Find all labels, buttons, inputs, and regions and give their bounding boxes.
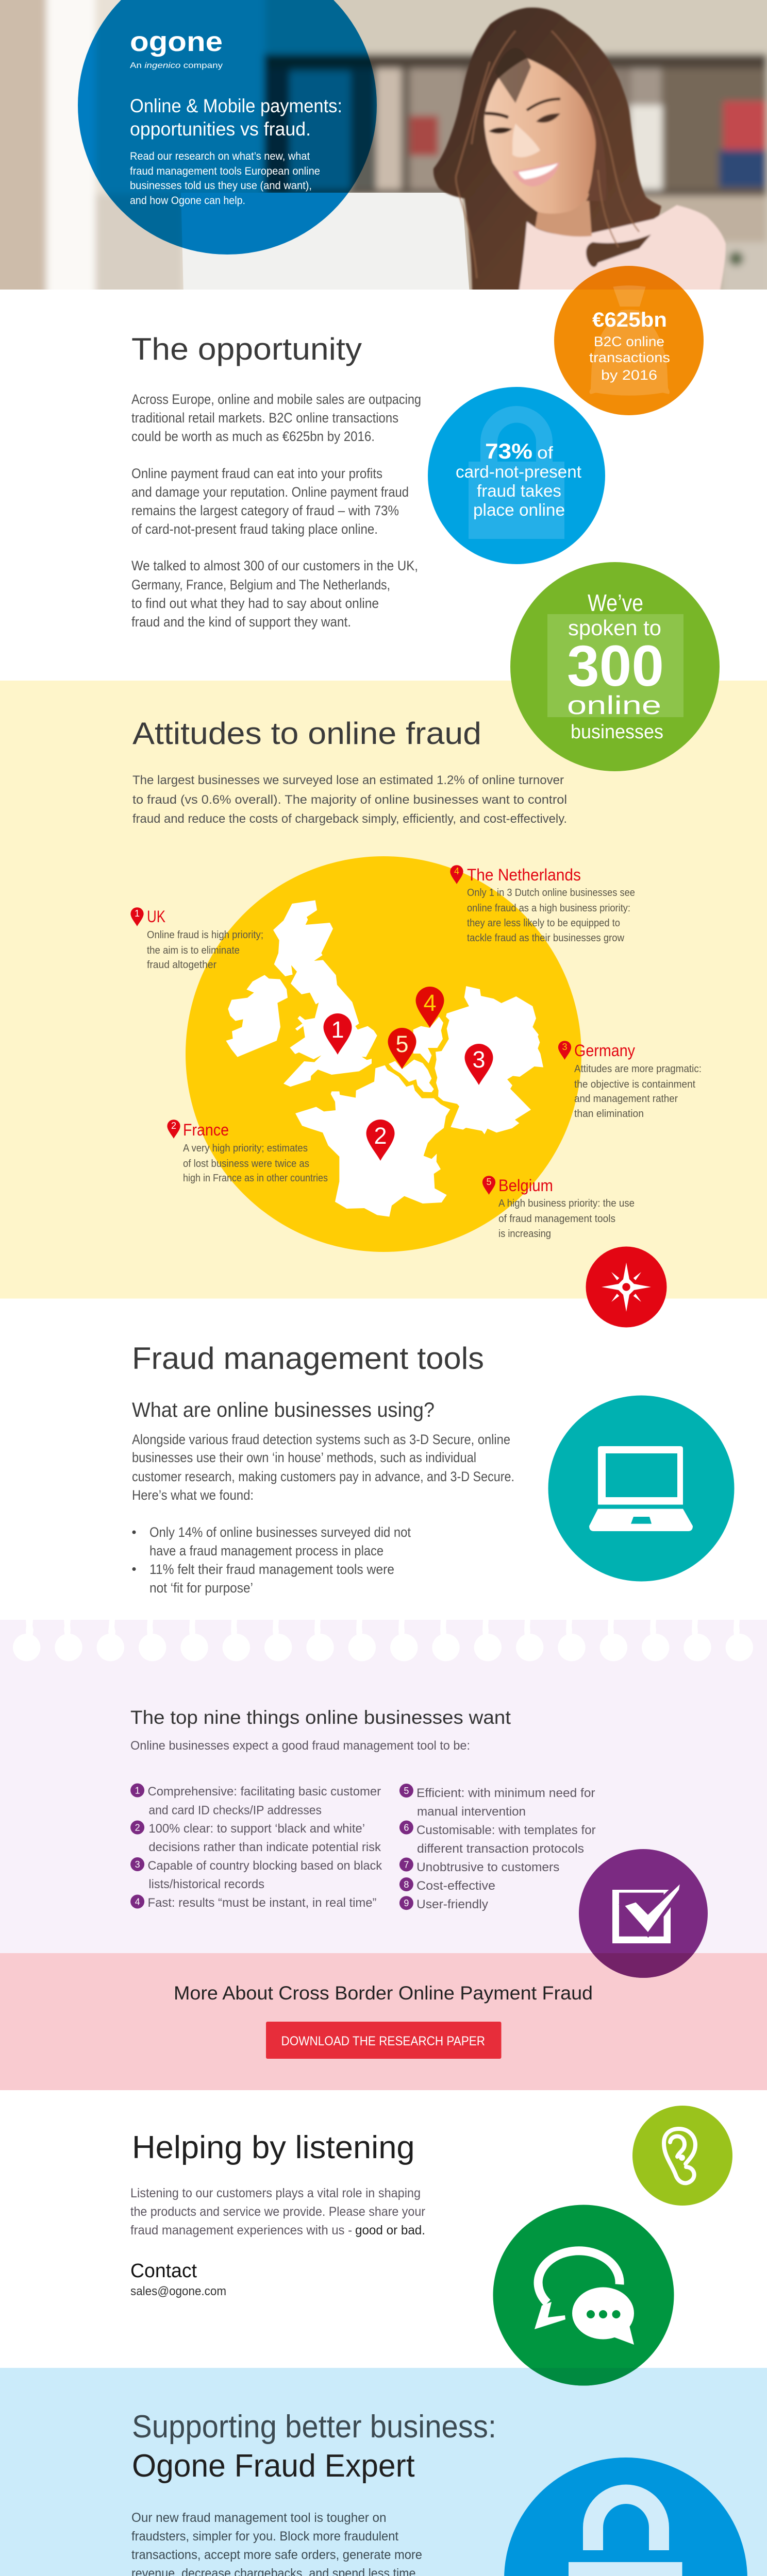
stat circle: spoken to 300 (510, 562, 720, 771)
map pin 1 (324, 1013, 352, 1055)
stat circle: spoken to 300: We’ve (588, 589, 643, 616)
attitudes intro text: The largest businesses we surveyed lose an estimated 1.2% of online turnover (132, 773, 564, 787)
panel: attitudes to online fraud (130, 716, 702, 1327)
callout: France: of lost business were twice as (183, 1158, 309, 1170)
callout: Germany: and management rather (574, 1093, 678, 1105)
opportunity body text: to find out what they had to say about online (131, 596, 379, 611)
tools body text (132, 1432, 514, 1503)
left list: items one to four: decisions rather than indicate potential risk (148, 1840, 381, 1854)
stat circle: 73 percent: 73% (485, 439, 532, 463)
map pin 4 (415, 987, 444, 1028)
button: download research paper: DOWNLOAD THE RESEARCH PAPER (281, 2034, 485, 2048)
panel: helping by listening (130, 2106, 732, 2385)
heading: fraud management tools: Fraud management tools (132, 1341, 484, 1376)
callout: Belgium (482, 1176, 635, 1240)
contact details (130, 2260, 226, 2298)
subheading: what are businesses using: What are online businesses using? (132, 1399, 435, 1421)
listening body text: fraud management experiences with us - (130, 2223, 352, 2238)
opportunity body text: traditional retail markets. B2C online transactions (131, 410, 398, 426)
yellow map circle (186, 856, 581, 1252)
tools body text: Here’s what we found: (132, 1487, 254, 1503)
icon: compass (586, 1247, 667, 1327)
callout: Germany: Germany (574, 1041, 635, 1060)
panel: more about cross border fraud (174, 1982, 593, 2059)
attitudes intro text: to fraud (vs 0.6% overall). The majority of online businesses want to control (132, 793, 567, 807)
stat circle: 73 percent: card-not-present (456, 462, 581, 481)
callout: France: 2 (171, 1121, 176, 1131)
tools body text: Alongside various fraud detection systems such as 3-D Secure, online (132, 1432, 510, 1447)
left list: items one to four: 2 (135, 1823, 140, 1833)
stat circle: spoken to 300: businesses (571, 721, 663, 743)
fraud expert body text: Our new fraud management tool is tougher on (131, 2511, 387, 2525)
stat circle: 73 percent: fraud takes (477, 481, 561, 500)
right list: items five to nine: Customisable: with templates for (416, 1823, 596, 1837)
ogone logo (130, 26, 223, 70)
heading: supporting better business (132, 2409, 496, 2484)
callout: France: France (183, 1121, 229, 1139)
sweater (519, 205, 726, 294)
left list: items one to four: Fast: results “must be instant, in real time” (147, 1896, 377, 1910)
callout: UK: the aim is to eliminate (147, 944, 240, 956)
heading: supporting better business: Supporting better business: (132, 2409, 496, 2445)
heading: the opportunity: The opportunity (131, 332, 362, 366)
findings bullet list: have a fraud management process in place (149, 1543, 384, 1558)
stat circle: 625bn: transactions (589, 350, 670, 365)
left list: items one to four: Comprehensive: facilitating basic customer (147, 1785, 381, 1799)
contact details: sales@ogone.com (130, 2284, 226, 2298)
map pin 3 (465, 1044, 493, 1085)
laptop (181, 193, 470, 294)
icon: money bag (589, 285, 670, 396)
callout: The Netherlands: 4 (454, 866, 459, 876)
stat circle: 625bn: by 2016 (601, 367, 657, 383)
panel: blue intro circle (78, 0, 377, 255)
icon: padlock watermark (469, 406, 564, 539)
right list: items five to nine: Unobtrusive to customers (416, 1860, 559, 1874)
right list: items five to nine: User-friendly (416, 1897, 488, 1911)
hero intro text (130, 150, 320, 207)
heading: top nine: The top nine things online businesses want (130, 1707, 511, 1728)
attitudes intro text: fraud and reduce the costs of chargeback simply, efficiently, and cost-effectively. (132, 812, 567, 826)
callout: UK: 1 (135, 908, 140, 919)
left list: items one to four: 100% clear: to support ‘black and white’ (148, 1822, 365, 1836)
stat circle: 625bn: €625bn (592, 309, 667, 331)
callout: Belgium: of fraud management tools (498, 1213, 615, 1225)
map pin 2 (366, 1120, 395, 1161)
ogone logo: ogone (130, 26, 223, 57)
heading: supporting better business: Ogone Fraud Expert (132, 2448, 415, 2484)
right list: items five to nine: Cost-effective (416, 1879, 495, 1893)
right list: items five to nine: 8 (404, 1879, 409, 1890)
attitudes intro text (132, 773, 567, 826)
callout: The Netherlands: The Netherlands (467, 866, 581, 884)
map pin 1: 1 (331, 1016, 344, 1043)
stat circle: 73 percent: of (537, 443, 554, 462)
hero intro text: and how Ogone can help. (130, 194, 245, 207)
panel: the opportunity (131, 266, 720, 771)
left list: items one to four: lists/historical records (148, 1877, 264, 1891)
opportunity body text: fraud and the kind of support they want. (131, 614, 351, 630)
right list: items five to nine: Efficient: with minimum need for (416, 1786, 595, 1800)
findings bullet list: not ‘fit for purpose’ (149, 1580, 253, 1596)
left list: items one to four: 1 (135, 1786, 140, 1796)
heading: attitudes: Attitudes to online fraud (132, 716, 481, 751)
opportunity body text: Germany, France, Belgium and The Netherlands, (131, 577, 390, 592)
icon: ear (632, 2106, 732, 2206)
neck (535, 193, 592, 236)
callout: Belgium: 5 (486, 1177, 492, 1187)
icon: checkbox (579, 1849, 708, 1978)
ogone logo: An ingenico company (130, 61, 223, 70)
map pin 5 (388, 1028, 416, 1069)
decorative hanging baubles (13, 1620, 753, 1661)
findings bullet list: Only 14% of online businesses surveyed did not (149, 1524, 411, 1540)
opportunity body text: remains the largest category of fraud – with 73% (131, 503, 399, 518)
hero intro text: fraud management tools European online (130, 165, 320, 177)
callout: The Netherlands: Only 1 in 3 Dutch online businesses see (467, 887, 635, 899)
callout: France: A very high priority; estimates (183, 1142, 308, 1154)
map pin 2: 2 (374, 1123, 387, 1149)
findings bullet list: 11% felt their fraud management tools were (149, 1562, 394, 1577)
right list: items five to nine: 7 (404, 1860, 409, 1870)
panel: top nine things (13, 1620, 753, 1978)
right list: items five to nine: 9 (404, 1898, 409, 1908)
callout: Belgium: Belgium (498, 1176, 553, 1195)
face (485, 58, 596, 214)
callout: Germany: than elimination (574, 1108, 644, 1120)
fraud expert body text: transactions, accept more safe orders, generate more (131, 2548, 422, 2562)
icon: padlock (504, 2458, 747, 2576)
contact details: Contact (130, 2260, 197, 2282)
left list: items one to four: 4 (135, 1897, 140, 1907)
icon: chat bubbles (493, 2205, 674, 2385)
callout: UK (130, 907, 263, 971)
panel: ogone fraud expert (131, 2409, 747, 2576)
opportunity body text: Across Europe, online and mobile sales are outpacing (131, 392, 421, 407)
right list: items five to nine: 5 (404, 1786, 409, 1796)
button: download research paper (266, 2022, 501, 2059)
hero title: opportunities vs fraud. (130, 118, 311, 140)
right list: items five to nine (399, 1784, 596, 1911)
callout: UK: fraud altogether (147, 959, 216, 971)
stat circle: 625bn: B2C online (594, 334, 664, 349)
listening body text: Listening to our customers plays a vital role in shaping (130, 2186, 421, 2200)
opportunity body text: of card-not-present fraud taking place online. (131, 521, 378, 537)
tools body text: businesses use their own ‘in house’ methods, such as individual (132, 1450, 476, 1465)
left list: items one to four: Capable of country blocking based on black (147, 1859, 382, 1873)
callout: The Netherlands: they are less likely to be equipped to (467, 917, 620, 929)
hero photo: woman at laptop (0, 0, 767, 309)
callout: Germany: the objective is containment (574, 1078, 695, 1090)
listening body text (130, 2186, 425, 2238)
left list: items one to four: and card ID checks/IP addresses (148, 1803, 322, 1818)
tools body text: customer research, making customers pay in advance, and 3-D Secure. (132, 1469, 514, 1484)
callout: Germany (558, 1041, 702, 1120)
fraud expert body text (131, 2511, 422, 2576)
stat circle: 73 percent: place online (473, 500, 565, 519)
top nine intro: Online businesses expect a good fraud management tool to be: (130, 1739, 470, 1753)
heading: helping by listening: Helping by listening (132, 2130, 415, 2165)
callout: UK: Online fraud is high priority; (147, 929, 263, 941)
findings bullet list (132, 1524, 411, 1596)
hero intro text: Read our research on what’s new, what (130, 150, 310, 162)
callout: France: high in France as in other countries (183, 1172, 328, 1184)
callout: The Netherlands (450, 865, 635, 944)
stat circle: spoken to 300: 300 (567, 634, 664, 698)
opportunity body text: Online payment fraud can eat into your profits (131, 466, 382, 481)
callout: Germany: Attitudes are more pragmatic: (574, 1063, 702, 1075)
map pin 4: 4 (423, 990, 437, 1016)
map pin 5: 5 (395, 1031, 409, 1057)
cta heading: More About Cross Border Online Payment Fraud (174, 1982, 593, 2004)
callout: France (167, 1120, 328, 1184)
hero title (130, 95, 342, 140)
left list: items one to four: 3 (135, 1859, 140, 1870)
right list: items five to nine: different transaction protocols (417, 1842, 584, 1856)
opportunity body text (131, 392, 421, 630)
icon: laptop (548, 1395, 734, 1582)
stat circle: 73 percent (428, 387, 605, 564)
callout: Belgium: is increasing (498, 1228, 551, 1240)
map of western europe (226, 900, 543, 1217)
hero title: Online & Mobile payments: (130, 95, 342, 116)
right list: items five to nine: 6 (404, 1823, 409, 1833)
callout: UK: UK (147, 907, 165, 926)
hair strands (456, 31, 639, 278)
listening body text: good or bad. (355, 2223, 425, 2238)
callout: The Netherlands: tackle fraud as their businesses grow (467, 932, 624, 944)
listening body text: the products and service we provide. Please share your (130, 2205, 425, 2219)
callout: Germany: 3 (562, 1042, 568, 1052)
hero intro text: businesses told us they use (and want), (130, 179, 312, 192)
map pin 3: 3 (472, 1046, 486, 1073)
opportunity body text: We talked to almost 300 of our customers in the UK, (131, 558, 418, 573)
stat circle: spoken to 300: online (567, 691, 661, 720)
fraud expert body text: fraudsters, simpler for you. Block more fraudulent (131, 2529, 398, 2544)
callout: Belgium: A high business priority: the use (498, 1197, 635, 1209)
panel: fraud management tools (132, 1341, 734, 1596)
callout: The Netherlands: online fraud as a high business priority: (467, 902, 630, 914)
stat circle: spoken to 300: spoken to (568, 616, 661, 640)
right list: items five to nine: manual intervention (417, 1805, 526, 1819)
opportunity body text: and damage your reputation. Online payment fraud (131, 484, 409, 500)
left list: items one to four (130, 1784, 382, 1910)
stat circle: 625bn (554, 266, 704, 415)
opportunity body text: could be worth as much as €625bn by 2016. (131, 429, 375, 444)
